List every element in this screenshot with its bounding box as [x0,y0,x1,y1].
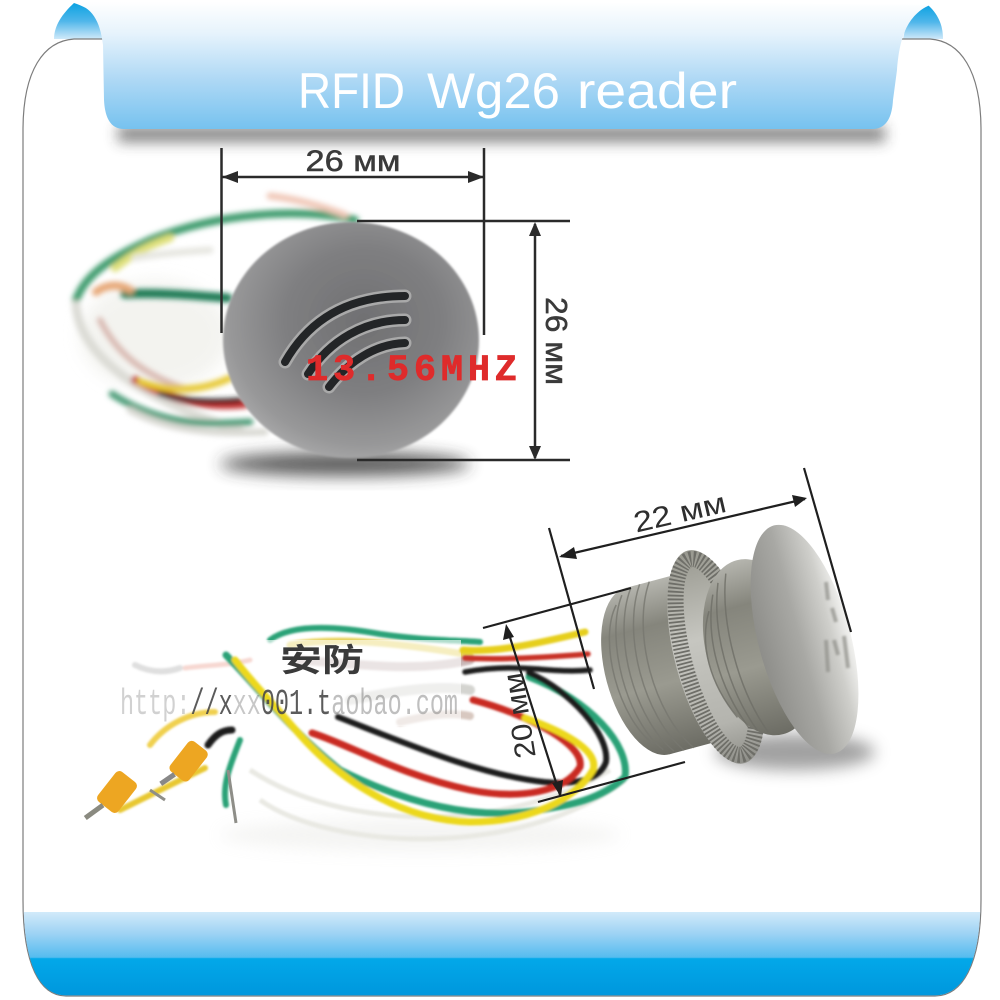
ribbon drop shadow [118,126,885,142]
title [298,63,737,119]
diameter value: 20 мм [498,670,543,760]
rear thread [585,570,737,765]
watermark url: http://xxx001.taobao.com [120,686,458,726]
bottom blue band [24,900,980,995]
right ribbon fold [903,5,943,39]
front thread [685,546,835,748]
knurled nut [648,540,784,774]
terminal two [158,739,210,796]
title: RFID [298,63,405,119]
length value: 22 мм [631,487,729,539]
height value: 26 мм [539,297,574,385]
faint white wires [250,770,625,839]
watermark veil [125,640,461,726]
top reader wires [76,196,355,433]
front cap [730,514,880,765]
lower reader wire shadow [220,819,620,851]
watermark shop name: 安防 [280,635,364,681]
watermark [120,635,458,726]
left ribbon fold [54,3,104,39]
length dimension [549,468,851,689]
top wire haze [80,280,230,390]
reader slots [285,296,405,387]
wires behind the watermark [135,628,480,722]
width dimension [222,145,484,335]
terminal one [82,769,139,832]
title: Wg26 [427,63,560,119]
thread diameter dimension [483,588,685,802]
width value: 26 мм [306,145,400,178]
frequency label: 13.56MHZ [306,350,517,392]
title: reader [577,63,737,119]
top reader shadow [220,452,470,476]
top reader disc [223,222,479,458]
height dimension [357,221,574,460]
metal pins [150,770,236,823]
wire terminals [82,739,236,832]
lower reader wires [120,632,625,822]
cap slots [826,582,848,672]
title ribbon [74,2,930,129]
lower reader shadow [715,734,875,770]
lower reader body [579,514,880,806]
